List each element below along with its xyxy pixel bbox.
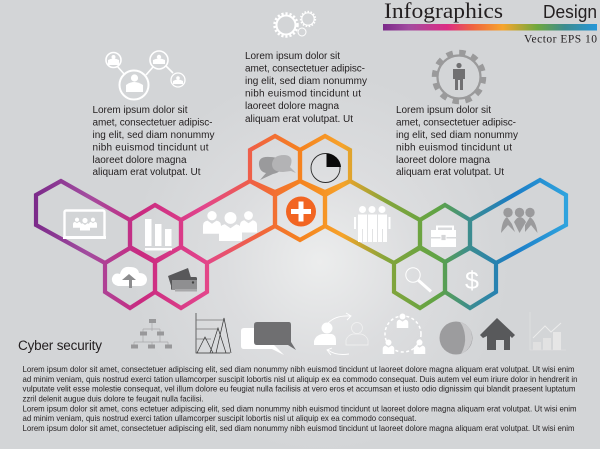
text block: left: aliquam erat volutpat. Ut	[92, 167, 201, 178]
body text: ad minim veniam, quis nostrud exerci tation ullamcorper suscipit lobortis nisl ut aliquip ex ea commodo consequat.	[22, 413, 416, 423]
text block: right: nibh euismod tincidunt ut	[396, 142, 512, 154]
icon: org chart	[131, 319, 172, 348]
icon: speech bubbles	[259, 155, 296, 180]
text block: middle: laoreet dolore magna	[245, 101, 339, 112]
body text: Lorem ipsum dolor sit amet, cons ectetuer adipiscing elit, sed diam nonummy nibh euismod tincidunt ut laoreet dolore magna aliquam erat volutpat. Ut wisi enim	[22, 404, 577, 414]
icon: bar chart	[145, 219, 172, 250]
text block: left: laoreet dolore magna	[92, 155, 187, 166]
title: Design	[543, 1, 597, 22]
icon: chat bubbles	[241, 322, 296, 355]
icon: people exchange arrows	[314, 313, 368, 355]
text block: middle: amet, consectetuer adipisc-	[245, 64, 365, 74]
text block: right: ing elit, sed diam nonummy	[396, 130, 518, 141]
icon: plus button	[286, 196, 316, 226]
text block: left: Lorem ipsum dolor sit	[92, 105, 188, 116]
subtitle: Vector EPS 10	[524, 34, 597, 46]
text block: right: aliquam erat volutpat. Ut	[396, 167, 504, 178]
text block: middle: nibh euismod tincidunt ut	[245, 88, 361, 100]
icon: briefcase	[431, 226, 456, 247]
icon: house	[480, 318, 515, 350]
text block: left: amet, consectetuer adipisc-	[92, 118, 212, 128]
heading: cyber security: Cyber security	[18, 338, 102, 353]
icon: wallet	[168, 268, 197, 292]
text block: right: laoreet dolore magna	[396, 155, 490, 166]
body text: Lorem ipsum dolor sit amet, consectetuer adipiscing elit, sed diam nonummy nibh euismod tincidunt ut laoreet dolore magna aliquam erat volutpat. Ut wisi enim	[22, 364, 575, 374]
icon: three grey people	[501, 208, 538, 233]
icon: dollar sign: $	[465, 267, 479, 295]
icon: cloud upload	[112, 267, 147, 288]
text block: right	[396, 105, 518, 178]
title	[384, 0, 597, 23]
text block: left	[92, 105, 214, 178]
icon: circle of people	[383, 313, 425, 354]
text block: middle: ing elit, sed diam nonummy	[245, 76, 367, 87]
icon: people network	[106, 51, 185, 100]
text block: left: nibh euismod tincidunt ut	[92, 142, 209, 154]
body text	[22, 364, 578, 433]
text block: middle: aliquam erat volutpat. Ut	[245, 114, 353, 125]
text block: middle: Lorem ipsum dolor sit	[245, 51, 340, 62]
icon: growth chart	[530, 312, 566, 350]
text block: left: ing elit, sed diam nonummy	[92, 130, 214, 141]
text block: right: amet, consectetuer adipisc-	[396, 118, 516, 128]
text block: right: Lorem ipsum dolor sit	[396, 105, 491, 116]
icon: team of people standing	[354, 206, 390, 242]
rainbow title bar	[383, 24, 597, 30]
hexagon chain	[36, 136, 566, 308]
icon: pie chart	[311, 153, 341, 182]
text block: middle	[245, 51, 367, 125]
body text: vulputate velit esse molestie consequat, vel illum dolore eu feugiat nulla facilisis at vero eros et accumsan et iusto odio dignissim qui blandit praesent luptatum	[22, 384, 576, 394]
icon: magnifier	[406, 268, 431, 292]
icon: three white people	[203, 211, 257, 241]
icon: video conference monitor	[63, 210, 106, 239]
icon: line and triangle chart	[196, 313, 231, 353]
icon: gear with person	[434, 52, 484, 102]
icon: globe	[440, 322, 472, 354]
body text: ad minim veniam, quis nostrud exerci tation ullamcorper suscipit lobortis nisl ut aliquip ex ea commodo consequat. Duis autem vel eum iriure dolor in hendrerit in	[22, 374, 578, 384]
body text: zzril delenit augue duis dolore te feugait nulla facilisi.	[22, 394, 204, 404]
body text: Lorem ipsum dolor sit amet, consectetuer adipiscing elit, sed diam nonummy nibh euismod tincidunt ut laoreet dolore magna aliquam erat volutpat. Ut wisi enim	[22, 423, 575, 433]
icon: gears	[274, 12, 315, 36]
